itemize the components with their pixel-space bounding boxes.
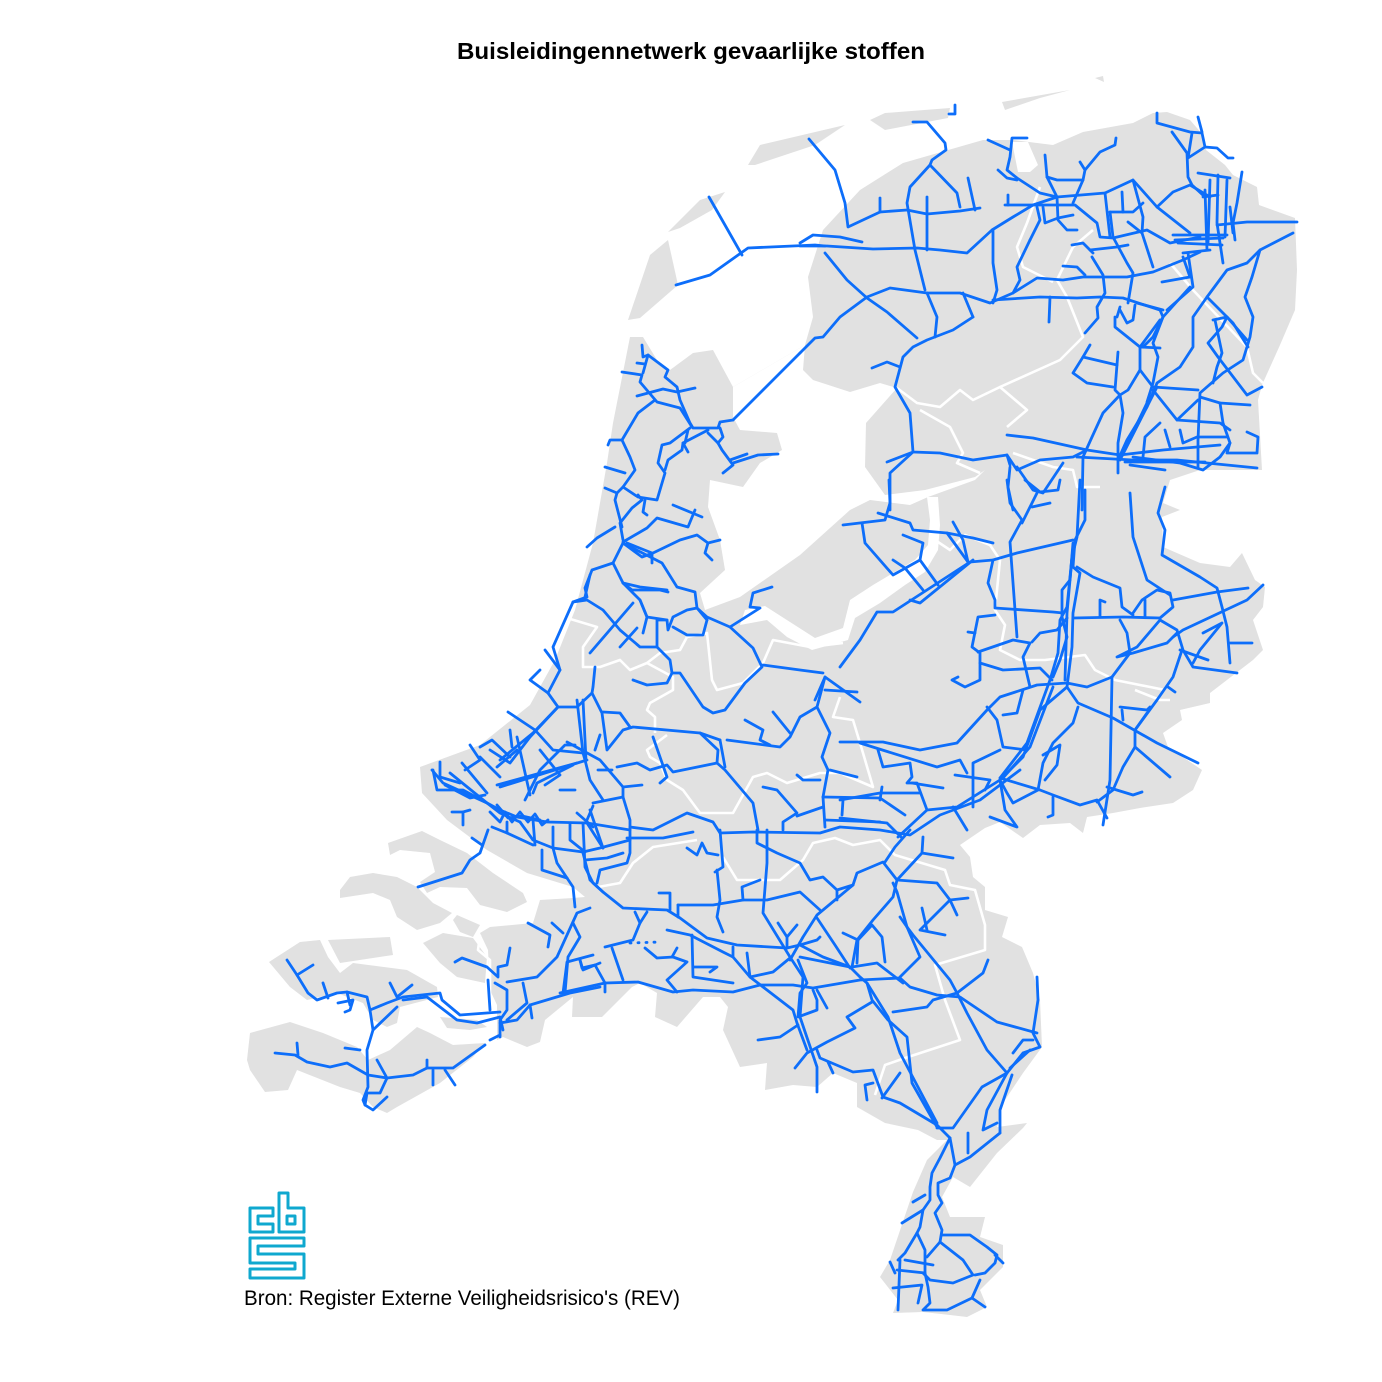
province borders [478,187,1263,1095]
pipeline crossing the IJsselmeer [733,353,800,420]
pipeline network: Zeeland [275,830,600,1110]
pipeline network: east (Overijssel, Gelderland, Flevoland) [840,480,1263,838]
pipeline network: south (Brabant) [560,830,1037,1127]
map: land area of the Netherlands [247,76,1297,1317]
pipeline network: Noord-Holland [587,345,778,560]
source note: Bron: Register Externe Veiligheidsrisico's (REV) [244,1287,680,1310]
pipeline network: Limburg [890,977,1040,1310]
water: IJsselmeer, Markermeer and inland waters [700,142,1038,650]
pipeline network: west (Zuid-Holland, Utrecht) [432,543,1020,907]
title: Buisleidingennetwerk gevaarlijke stoffen [457,38,925,64]
pipeline network: north (Friesland, Groningen, Drenthe) [676,105,1297,510]
pipeline network: Rotterdam harbour cluster [490,583,668,825]
logo: CBS [250,1193,304,1278]
